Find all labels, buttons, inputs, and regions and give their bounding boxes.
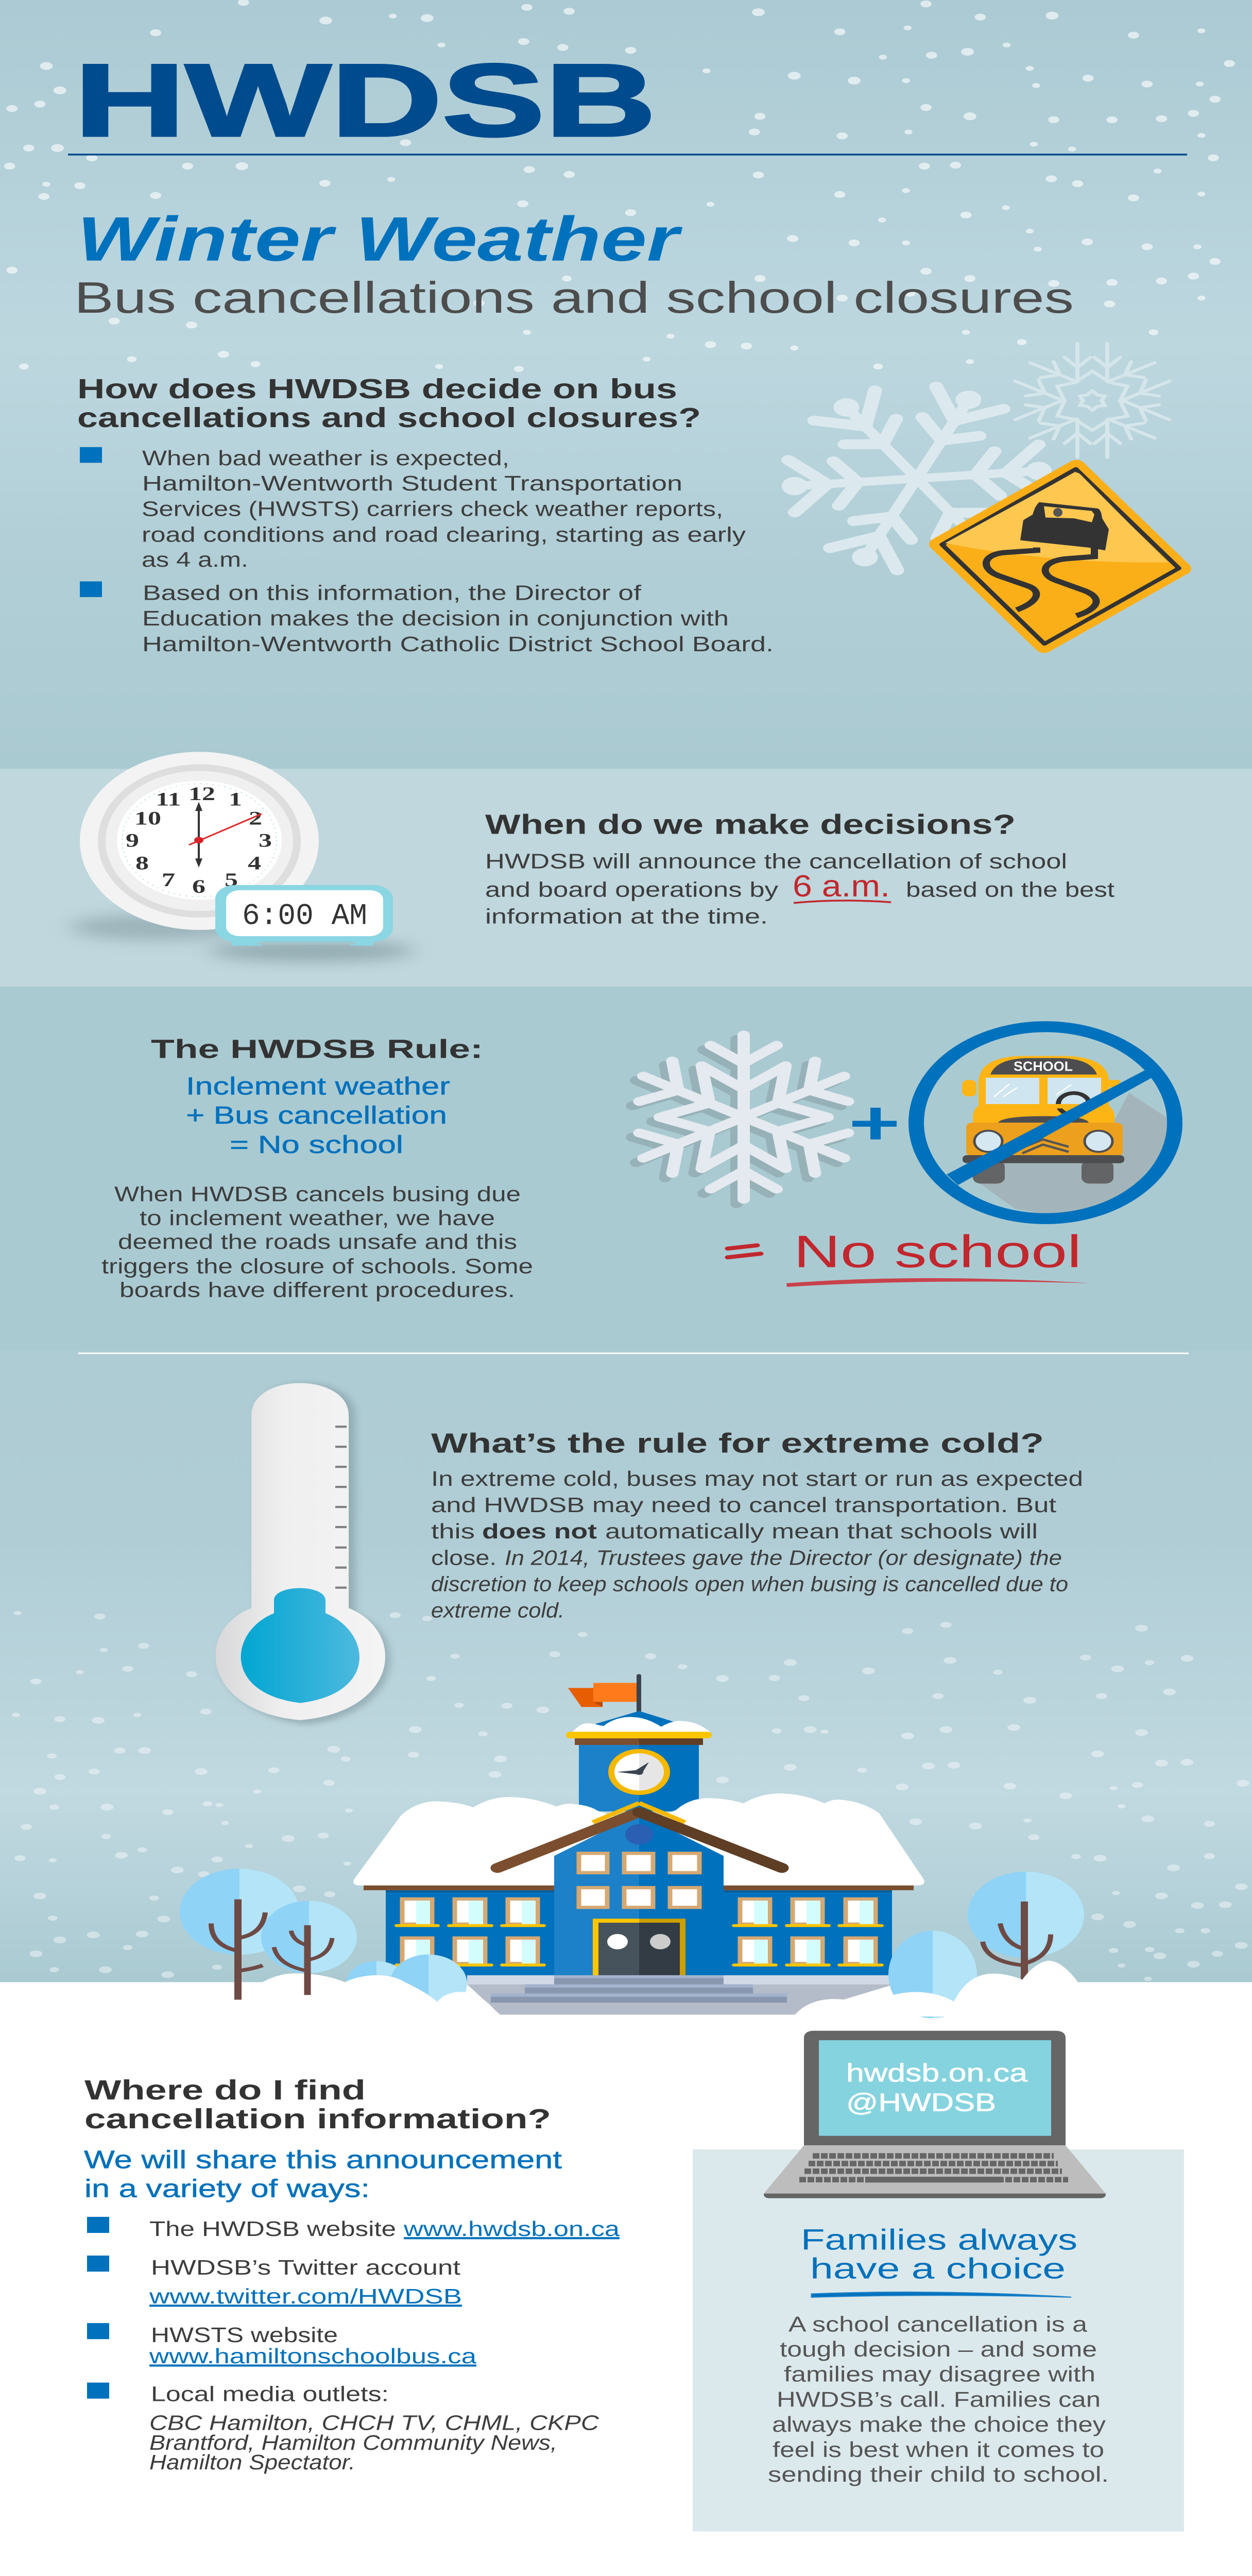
text block: families choice paragraph: families may disagree with <box>784 2362 1095 2386</box>
icon: digital alarm clock <box>209 885 415 961</box>
heading: extreme cold: What’s the rule for extreme cold? <box>431 1427 1044 1459</box>
clock numerals: 3 <box>259 830 272 851</box>
icon: no school bus <box>916 1027 1175 1218</box>
text block: first decision bullet: When bad weather is expected, <box>142 446 509 470</box>
text block: extreme cold rule: and HWDSB may need to cancel transportation. But <box>431 1493 1056 1517</box>
tower clock <box>608 1749 670 1795</box>
door <box>593 1919 685 1975</box>
clock numerals: 8 <box>135 853 149 874</box>
wings <box>386 1890 892 1981</box>
panel: families always have a choice <box>693 2149 1184 2532</box>
wing windows <box>402 1899 876 1963</box>
laptop screen text <box>846 2058 1027 2116</box>
text block: announcement by 6 a.m. <box>485 850 1114 928</box>
icon: large pale snowflake <box>736 351 1097 606</box>
equation: inclement weather plus bus cancellation: = No school <box>230 1131 403 1159</box>
text block: rule explanation: triggers the closure of schools. Some <box>101 1255 533 1278</box>
clock hands <box>195 802 202 868</box>
snowfall: top dots <box>4 0 1235 372</box>
background: white lower section <box>0 1982 1252 2576</box>
text block: rule explanation <box>101 1182 533 1302</box>
blue mercury <box>241 1588 359 1703</box>
text block: rule explanation: deemed the roads unsafe and this <box>118 1230 517 1253</box>
text block: extreme cold rule: extreme cold. <box>431 1599 564 1622</box>
flag <box>568 1674 641 1713</box>
icon: white paper snowflake <box>620 1035 861 1204</box>
list item: website <box>87 2217 620 2241</box>
text block: first decision bullet: road conditions and road clearing, starting as early <box>142 523 746 546</box>
steps <box>467 1975 894 2014</box>
equation: inclement weather plus bus cancellation: + Bus cancellation <box>186 1102 447 1129</box>
list item: media outlets: Brantford, Hamilton Community News, <box>149 2431 557 2454</box>
handwritten 6 a.m.: 6 a.m. <box>793 869 890 903</box>
icon: thermometer <box>215 1383 390 1724</box>
list item: twitter <box>87 2256 462 2308</box>
tower <box>566 1711 712 1811</box>
clock numerals: 2 <box>249 808 262 828</box>
keyboard <box>799 2156 1068 2180</box>
heading: when do we make decisions: When do we make decisions? <box>485 809 1016 840</box>
illustration: snow drifts <box>227 1961 1079 2016</box>
icon: outlined small snowflake <box>1009 344 1176 457</box>
bus <box>962 1056 1124 1183</box>
background: extreme cold sky <box>0 1350 1252 1982</box>
text block: families choice paragraph: HWDSB’s call. Families can <box>777 2387 1101 2411</box>
center windows <box>579 1853 699 1907</box>
handwritten: families always have a choice: have a choice <box>810 2252 1066 2285</box>
illustration: tree right <box>968 1872 1084 1982</box>
text block: rule explanation: to inclement weather, we have <box>140 1206 495 1230</box>
icon: slippery road sign <box>938 466 1182 647</box>
text block: first decision bullet: Services (HWSTS) carriers check weather reports, <box>142 497 723 521</box>
subtitle: Bus cancellations and school closures <box>74 274 1074 323</box>
list item: media outlets: CBC Hamilton, CHCH TV, CHML, CKPC <box>149 2411 599 2435</box>
text block: extreme cold rule: does not <box>482 1519 597 1543</box>
equation: inclement weather plus bus cancellation: Inclement weather <box>186 1073 450 1100</box>
subheading: variety of ways: in a variety of ways: <box>84 2174 370 2202</box>
text block: second decision bullet: Education makes the decision in conjunction with <box>142 606 729 630</box>
clock numerals: 9 <box>126 830 139 851</box>
heading: The HWDSB Rule: The HWDSB Rule: <box>151 1035 483 1064</box>
text block: second decision bullet <box>80 581 774 656</box>
list item: website: The HWDSB website <box>149 2217 396 2241</box>
laptop screen text: hwdsb.on.ca <box>846 2058 1027 2087</box>
clock numerals: 4 <box>248 853 261 874</box>
text block: families choice paragraph: always make the choice they <box>772 2413 1106 2436</box>
text block: first decision bullet <box>80 446 746 571</box>
text block: second decision bullet: Hamilton-Wentworth Catholic District School Board. <box>142 632 774 656</box>
bus: SCHOOL <box>1014 1059 1073 1074</box>
illustration: bushes <box>347 1931 977 2019</box>
text block: announcement by 6 a.m.: information at the time. <box>485 905 768 928</box>
text block: extreme cold rule: this <box>431 1519 475 1543</box>
list item: HWSTS: www.hamiltonschoolbus.ca <box>149 2344 476 2368</box>
clock numerals: 7 <box>162 869 175 890</box>
list item: HWSTS <box>87 2323 476 2368</box>
subheading: variety of ways: We will share this announcement <box>84 2145 562 2174</box>
text block: first decision bullet: Hamilton-Wentworth Student Transportation <box>142 471 682 495</box>
icon: digital alarm clock: 6:00 AM <box>242 900 367 934</box>
snow covered roof <box>353 1793 924 1886</box>
text block: families choice paragraph: feel is best when it comes to <box>773 2437 1104 2462</box>
text block: extreme cold rule: In 2014, Trustees gave the Director (or designate) the <box>505 1546 1062 1570</box>
text block: announcement by 6 a.m.: HWDSB will announce the cancellation of school <box>485 850 1067 873</box>
snowfall: lower dots <box>12 1611 1249 1981</box>
panel: when do we make decisions band <box>0 769 1252 987</box>
skid marks <box>986 548 1037 610</box>
clock numerals: 10 <box>134 808 161 828</box>
illustration: left tree trunks <box>211 1900 332 1999</box>
list item: HWSTS: HWSTS website <box>151 2323 338 2347</box>
equation: inclement weather plus bus cancellation <box>186 1073 450 1159</box>
subheading: variety of ways <box>84 2145 562 2202</box>
list item: media outlets: Local media outlets: <box>151 2382 389 2406</box>
list item: media outlets: Hamilton Spectator. <box>149 2450 355 2474</box>
list item: media outlets <box>87 2382 599 2474</box>
list item: twitter: HWDSB’s Twitter account <box>151 2256 460 2279</box>
clock numerals: 11 <box>156 789 181 810</box>
clock numerals: 1 <box>229 789 242 810</box>
text block: rule explanation: When HWDSB cancels busing due <box>114 1182 521 1206</box>
background: top winter sky <box>0 0 1252 769</box>
heading: how does HWDSB decide: cancellations and school closures? <box>77 402 701 433</box>
center block <box>554 1814 639 1976</box>
text block: extreme cold rule: In extreme cold, buses may not start or run as expected <box>431 1467 1083 1490</box>
header rule <box>68 154 1187 156</box>
clock numerals: 5 <box>225 869 238 890</box>
laptop screen text: @HWDSB <box>846 2088 996 2116</box>
clock numerals <box>126 783 272 897</box>
handwritten: equals no school: No school <box>794 1226 1082 1277</box>
illustration: tree crowns left <box>180 1869 357 1973</box>
text block: families choice paragraph: tough decision – and some <box>780 2337 1097 2361</box>
car on sign <box>1020 502 1109 550</box>
divider <box>78 1352 1189 1354</box>
clock numerals: 12 <box>188 783 215 804</box>
text block: rule explanation: boards have different procedures. <box>119 1278 515 1302</box>
text block: families choice paragraph <box>768 2312 1109 2486</box>
text block: announcement by 6 a.m.: based on the best <box>906 878 1114 902</box>
bus long shadow <box>980 1093 1168 1217</box>
panel: HWDSB rule background <box>0 987 1252 1351</box>
icon: plus sign <box>852 1108 897 1140</box>
heading: how does HWDSB decide: How does HWDSB decide on bus <box>77 373 677 404</box>
text block: announcement by 6 a.m.: and board operations by <box>485 878 779 902</box>
handwritten: equals no school <box>728 1226 1091 1287</box>
logo: HWDSB wordmark: HWDSB <box>74 43 656 158</box>
icon: laptop <box>764 2031 1106 2198</box>
text block: second decision bullet: Based on this information, the Director of <box>143 581 642 605</box>
icon: wall clock <box>70 752 319 940</box>
list item: twitter: www.twitter.com/HWDSB <box>149 2284 462 2308</box>
text block: families choice paragraph: sending their child to school. <box>768 2463 1109 2486</box>
gable roof <box>593 1803 685 1822</box>
illustration: school building <box>353 1674 924 2014</box>
text block: extreme cold rule: close. <box>431 1546 496 1570</box>
list item: website: www.hwdsb.on.ca <box>403 2217 620 2241</box>
heading: where do I find cancellation information: Where do I find <box>84 2074 366 2105</box>
handwritten: families always have a choice <box>801 2223 1077 2297</box>
handwritten: families always have a choice: Families always <box>801 2223 1077 2256</box>
heading: where do I find cancellation information <box>84 2074 551 2134</box>
text block: extreme cold rule: automatically mean that schools will <box>605 1519 1038 1543</box>
heading: where do I find cancellation information: cancellation information? <box>84 2103 551 2134</box>
title: Winter Weather: Winter Weather <box>77 204 683 274</box>
clock numerals: 6 <box>192 876 205 897</box>
text block: families choice paragraph: A school cancellation is a <box>788 2312 1088 2336</box>
text block: first decision bullet: as 4 a.m. <box>142 548 248 571</box>
heading: how does HWDSB decide <box>77 373 701 433</box>
text block: extreme cold rule <box>431 1467 1083 1622</box>
